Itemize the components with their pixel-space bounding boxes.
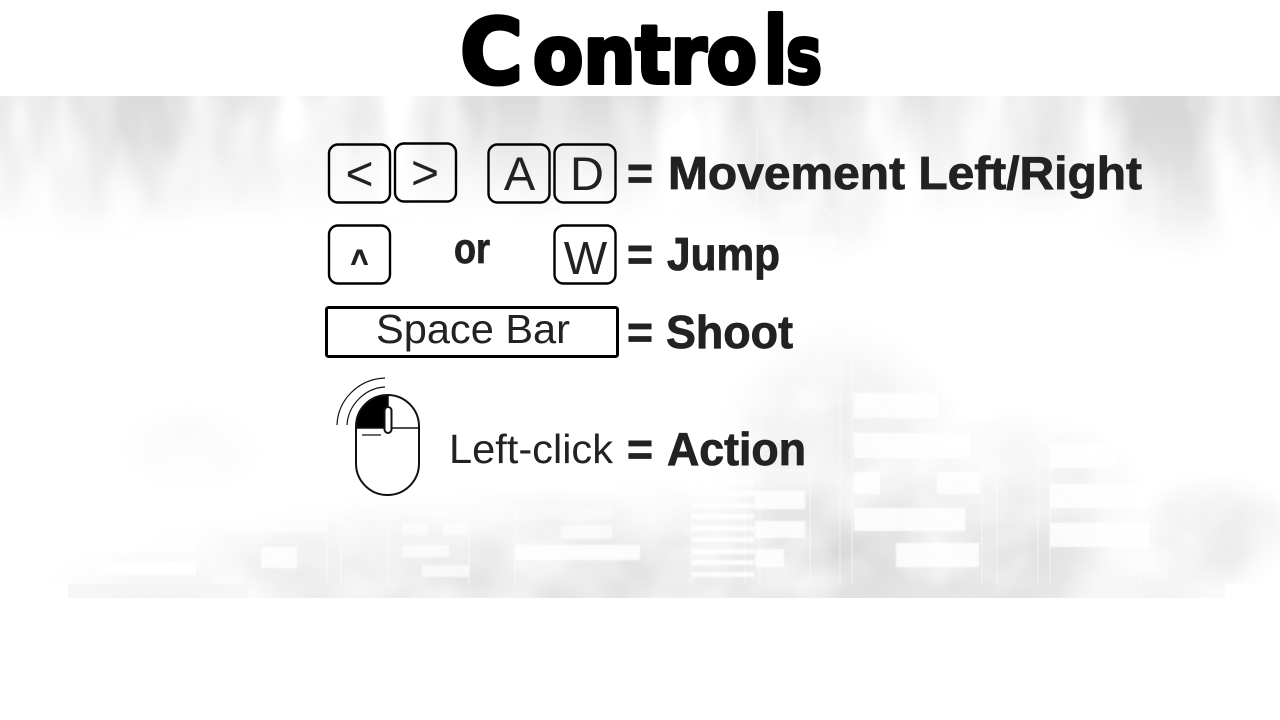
key: up arrow [329, 226, 390, 284]
key: right arrow [395, 144, 456, 202]
key: left arrow [329, 144, 390, 202]
key: D: D [570, 147, 604, 200]
label: action: = [627, 423, 653, 475]
label: movement: = [627, 147, 653, 199]
title: l [764, 0, 788, 105]
row: jump controls [329, 225, 780, 284]
icon: mouse with left button highlighted [337, 378, 419, 495]
row: movement controls [329, 144, 1142, 202]
label: action: Action [667, 423, 806, 475]
key: W: W [564, 232, 608, 284]
label: shoot: = [627, 306, 653, 358]
key: right arrow: > [411, 147, 439, 200]
key: W [554, 226, 616, 284]
title: C [460, 0, 523, 105]
key: D [554, 144, 616, 202]
key: space bar: Space Bar [376, 306, 570, 352]
title: s [786, 9, 822, 102]
background: misty city skyline [0, 96, 1280, 598]
key: left arrow: < [345, 148, 374, 201]
label: jump: = [627, 228, 653, 280]
key: space bar [326, 306, 618, 356]
title [460, 0, 822, 105]
row: action control [337, 378, 806, 495]
label: movement: Movement Left/Right [668, 147, 1142, 199]
label: jump: Jump [667, 228, 780, 280]
title: ontro [533, 9, 757, 102]
key: A [488, 144, 550, 202]
row: shoot control [326, 306, 793, 358]
text: left-click: Left-click [449, 426, 613, 472]
label: shoot: Shoot [666, 306, 793, 358]
label: jump [627, 228, 780, 280]
key: up arrow: ^ [351, 243, 368, 280]
text: or: or [454, 225, 490, 273]
key: A: A [504, 147, 536, 200]
